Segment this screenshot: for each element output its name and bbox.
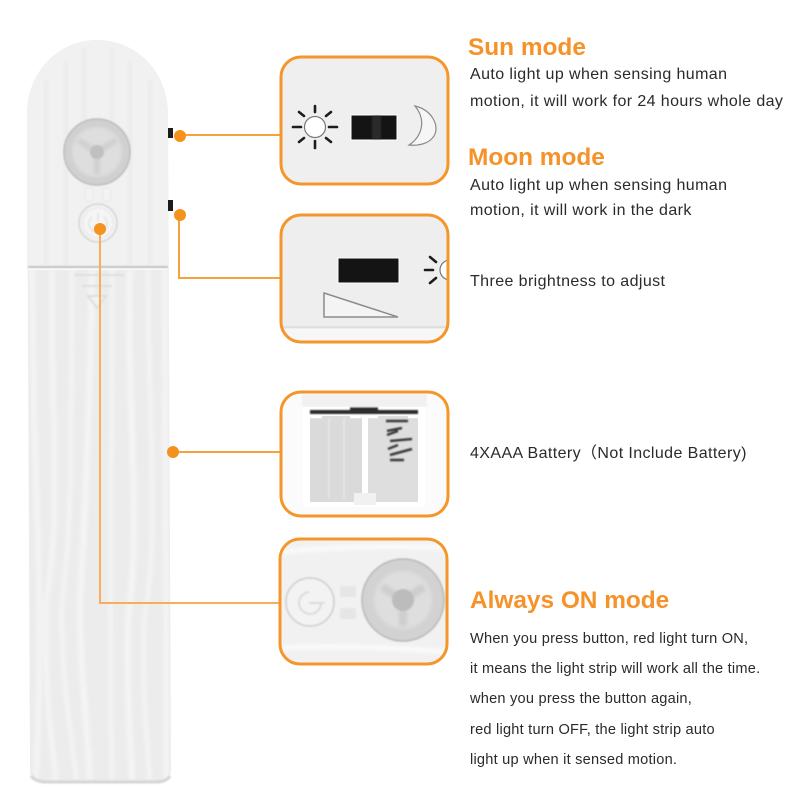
switch bbox=[351, 115, 397, 140]
cover arrow bbox=[74, 275, 124, 308]
icon: partial sun bbox=[424, 256, 446, 284]
connector: battery bbox=[167, 446, 281, 458]
indicator windows bbox=[340, 586, 356, 619]
text: always on description: when you press the button again, bbox=[470, 691, 692, 707]
text: brightness: Three brightness to adjust bbox=[470, 273, 665, 290]
text: always on description: red light turn OFF, the light strip auto bbox=[470, 722, 715, 738]
text: sun mode description bbox=[470, 66, 783, 110]
text: battery: 4XAAA Battery（Not Include Battery) bbox=[470, 445, 747, 462]
panel: power button and sensor close-up bbox=[280, 539, 447, 664]
text: moon mode description: Auto light up when sensing human bbox=[470, 177, 727, 194]
battery spring bbox=[386, 421, 412, 460]
compartment bbox=[303, 407, 425, 507]
icon: moon bbox=[409, 106, 436, 145]
power button bbox=[79, 204, 117, 242]
switch nubs bbox=[168, 128, 173, 211]
connector: power button bbox=[94, 223, 281, 603]
sensor lens bbox=[64, 119, 130, 185]
text: always on description bbox=[470, 631, 760, 768]
power button bbox=[286, 578, 334, 626]
text: always on description: it means the light strip will work all the time. bbox=[470, 661, 760, 677]
panel: sun and moon switch bbox=[281, 57, 448, 184]
heading: moon mode: Moon mode bbox=[468, 144, 605, 171]
panel: brightness switch bbox=[281, 215, 460, 342]
sliding cover seam bbox=[28, 266, 168, 268]
sensor lens bbox=[362, 559, 444, 641]
connector: sun/moon switch bbox=[174, 130, 281, 142]
device body bbox=[27, 40, 171, 782]
indicator windows bbox=[85, 188, 111, 201]
switch bbox=[338, 258, 399, 283]
diagram: device, callouts and detail panels bbox=[27, 40, 450, 784]
panel: battery compartment bbox=[281, 392, 448, 516]
icon: sun bbox=[293, 106, 337, 148]
text: always on description: When you press button, red light turn ON, bbox=[470, 631, 748, 647]
text: moon mode description: motion, it will work in the dark bbox=[470, 202, 692, 219]
text: always on description: light up when it sensed motion. bbox=[470, 752, 677, 768]
heading: sun mode: Sun mode bbox=[468, 34, 586, 61]
text: sun mode description: Auto light up when sensing human bbox=[470, 66, 727, 83]
text: moon mode description bbox=[470, 177, 727, 219]
icon: brightness wedge bbox=[324, 293, 398, 317]
connector: brightness switch bbox=[174, 209, 281, 278]
text: sun mode description: motion, it will work for 24 hours whole day bbox=[470, 92, 783, 110]
heading: always on mode: Always ON mode bbox=[470, 587, 669, 614]
